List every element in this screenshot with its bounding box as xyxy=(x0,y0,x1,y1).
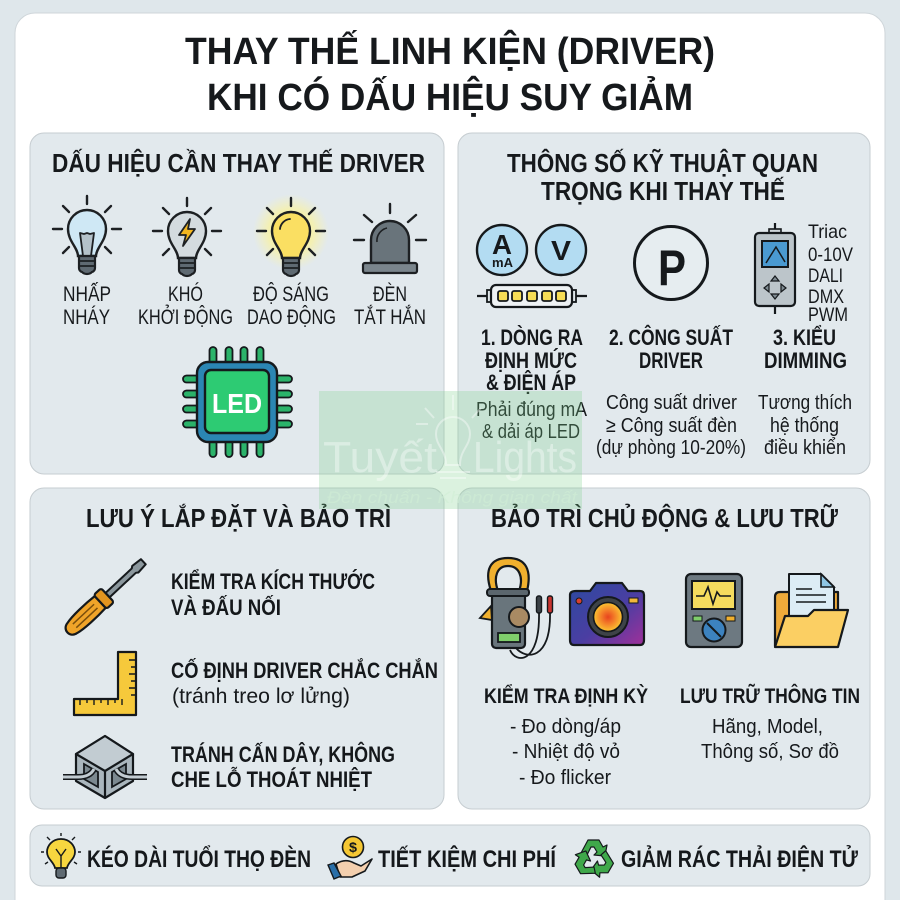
dimming type list xyxy=(808,221,853,326)
label: flickering: NHẤP xyxy=(63,281,111,306)
label: fluctuating brightness xyxy=(247,281,336,329)
label: avoid pinched wires: CHE LỖ THOÁT NHIỆT xyxy=(171,766,372,792)
column: periodic checks: - Đo flicker xyxy=(519,766,611,789)
icon: hand with coin: $ xyxy=(349,839,357,855)
spec 2: driver power: 2. CÔNG SUẤT xyxy=(609,325,733,350)
panel: signs a driver needs replacing xyxy=(30,133,444,474)
spec 2: driver power: DRIVER xyxy=(639,348,703,373)
icon: power symbol xyxy=(634,226,708,300)
icon: hard start bulb xyxy=(153,198,221,276)
spec 1: rated current and voltage xyxy=(476,325,587,443)
icon: ampere and volt meters: A xyxy=(492,229,512,260)
spec 3: dimming type: 3. KIỂU xyxy=(773,325,836,350)
spec 1: rated current and voltage: Phải đúng mA xyxy=(476,398,587,421)
spec 2: driver power: ≥ Công suất đèn xyxy=(606,414,737,437)
icon: set square ruler xyxy=(74,652,136,715)
icon: LED chip: LED xyxy=(212,388,262,419)
icon: clamp meter xyxy=(480,558,552,658)
spec 3: dimming type xyxy=(758,325,852,459)
column: information records xyxy=(680,684,860,763)
label: secure the driver: (tránh treo lơ lửng) xyxy=(172,685,350,708)
icon: fluctuating brightness bulb xyxy=(253,194,329,276)
spec 1: rated current and voltage: ĐỊNH MỨC xyxy=(485,348,577,373)
column: information records: Thông số, Sơ đồ xyxy=(701,740,839,763)
label: flickering xyxy=(63,281,111,329)
dimming type list: DMX xyxy=(808,286,844,308)
label: avoid pinched wires xyxy=(171,742,395,792)
label: lamp out: TẮT HẮN xyxy=(354,304,426,329)
column: information records: Hãng, Model, xyxy=(712,715,823,738)
icon: folder with document xyxy=(775,574,848,647)
column: periodic checks: KIỂM TRA ĐỊNH KỲ xyxy=(484,684,648,708)
icon: flickering bulb xyxy=(53,196,121,274)
spec 1: rated current and voltage: & dải áp LED xyxy=(482,420,580,443)
spec 3: dimming type: DIMMING xyxy=(764,348,847,373)
icon: screwdriver xyxy=(61,555,150,639)
panel: benefits footer xyxy=(30,825,870,886)
panel: proactive maintenance and records xyxy=(458,488,870,809)
icon: LED chip xyxy=(183,347,292,457)
heading: specifications: THÔNG SỐ KỸ THUẬT QUAN xyxy=(507,148,818,178)
label: lamp out: ĐÈN xyxy=(373,281,407,306)
label: hard to start: KHỞI ĐỘNG xyxy=(138,304,233,329)
spec 1: rated current and voltage: & ĐIỆN ÁP xyxy=(486,370,576,395)
column: information records: LƯU TRỮ THÔNG TIN xyxy=(680,684,860,708)
heading: installation: LƯU Ý LẮP ĐẶT VÀ BẢO TRÌ xyxy=(86,503,391,533)
label: check size and wiring xyxy=(171,569,375,620)
heading: proactive maintenance: BẢO TRÌ CHỦ ĐỘNG & LƯU TRỮ xyxy=(491,503,839,533)
heading: specifications xyxy=(507,148,818,206)
icon: lifetime bulb xyxy=(41,833,81,878)
icon: hand with coin xyxy=(328,836,372,879)
icon: ampere and volt meters: mA xyxy=(492,256,513,270)
label: hard to start: KHÓ xyxy=(168,281,203,306)
column: periodic checks: - Nhiệt độ vỏ xyxy=(512,740,620,763)
icon: multimeter with waveform xyxy=(686,574,742,647)
label: hard to start xyxy=(138,281,233,329)
watermark bulb xyxy=(416,395,481,478)
icon: dead lamp beacon xyxy=(354,204,426,273)
label: saves cost: TIẾT KIỆM CHI PHÍ xyxy=(378,845,557,873)
dimming type list: 0-10V xyxy=(808,244,853,266)
icon: dimmer controller xyxy=(755,223,795,314)
label: avoid pinched wires: TRÁNH CẤN DÂY, KHÔNG xyxy=(171,742,395,767)
label: check size and wiring: KIỂM TRA KÍCH THƯỚC xyxy=(171,569,375,594)
spec 2: driver power: Công suất driver xyxy=(606,391,737,414)
spec 3: dimming type: điều khiển xyxy=(764,436,846,459)
watermark: Tuyết Lights: Tuyết xyxy=(323,433,437,482)
icon: power symbol: P xyxy=(658,240,686,296)
title xyxy=(185,29,715,119)
heading: signs: DẤU HIỆU CẦN THAY THẾ DRIVER xyxy=(52,148,425,178)
watermark: Tuyết Lights: Lights xyxy=(473,433,577,482)
spec 3: dimming type: Tương thích xyxy=(758,391,852,414)
icon: ampere and volt meters xyxy=(477,225,586,275)
icon: recycle arrows xyxy=(571,840,617,880)
label: fluctuating brightness: DAO ĐỘNG xyxy=(247,304,336,329)
label: fluctuating brightness: ĐỘ SÁNG xyxy=(253,281,329,306)
icon: ampere and volt meters: V xyxy=(551,235,571,266)
column: periodic checks xyxy=(484,684,648,789)
spec 2: driver power xyxy=(596,325,746,459)
dimming type list: PWM xyxy=(808,304,848,326)
label: flickering: NHÁY xyxy=(63,304,110,329)
dimming type list: DALI xyxy=(808,265,843,287)
icon: LED strip xyxy=(477,285,587,307)
dimming type list: Triac xyxy=(808,221,847,243)
label: lamp out xyxy=(354,281,426,329)
spec 1: rated current and voltage: 1. DÒNG RA xyxy=(481,325,583,350)
spec 2: driver power: (dự phòng 10-20%) xyxy=(596,436,746,459)
column: periodic checks: - Đo dòng/áp xyxy=(510,715,621,738)
heading: specifications: TRỌNG KHI THAY THẾ xyxy=(541,177,785,206)
label: secure the driver: CỐ ĐỊNH DRIVER CHẮC CHẮN xyxy=(171,657,438,683)
icon: thermal camera xyxy=(570,583,644,645)
label: extends lamp life: KÉO DÀI TUỔI THỌ ĐÈN xyxy=(87,845,311,873)
title: KHI CÓ DẤU HIỆU SUY GIẢM xyxy=(207,75,693,119)
label: check size and wiring: VÀ ĐẤU NỐI xyxy=(171,594,281,620)
title: THAY THẾ LINH KIỆN (DRIVER) xyxy=(185,29,715,73)
panel: key specifications xyxy=(458,133,870,474)
watermark: Tuyết Lights: Đèn chuẩn - Không gian chất xyxy=(327,488,578,507)
watermark: Tuyết Lights xyxy=(319,391,582,509)
icon: driver box with cables xyxy=(63,736,147,798)
label: secure the driver xyxy=(171,657,438,708)
spec 3: dimming type: hệ thống xyxy=(770,414,839,437)
panel: installation and maintenance notes xyxy=(30,488,444,809)
